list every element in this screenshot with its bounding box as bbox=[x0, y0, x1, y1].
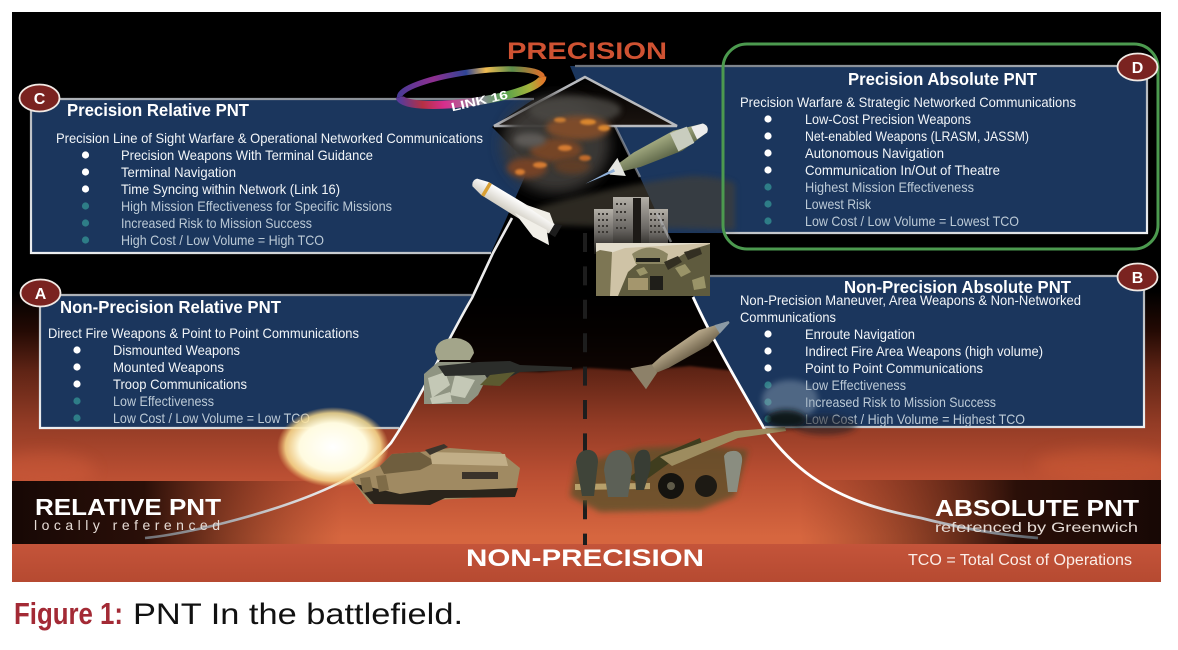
absolute PNT curve bbox=[693, 297, 1038, 538]
panel A: Non-Precision Relative PNT: Direct Fire Weapons & Point to Point Communications bbox=[48, 325, 359, 341]
landscape haze bbox=[535, 176, 735, 230]
panel D: Precision Absolute PNT: Low-Cost Precision Weapons bbox=[805, 111, 971, 127]
heading: non-precision: NON-PRECISION bbox=[466, 545, 704, 572]
panel C: Precision Relative PNT: Precision Relative PNT bbox=[67, 100, 249, 120]
badge B: B bbox=[1132, 270, 1143, 287]
panel C: Precision Relative PNT: Precision Line of Sight Warfare & Operational Networked Communications bbox=[56, 130, 483, 146]
building bbox=[594, 197, 668, 254]
panel C: Precision Relative PNT: High Cost / Low Volume = High TCO bbox=[121, 232, 324, 248]
panel B: Non-Precision Absolute PNT: Indirect Fire Area Weapons (high volume) bbox=[805, 343, 1043, 359]
panel D: Precision Absolute PNT: Precision Absolute PNT bbox=[848, 69, 1037, 89]
badge B bbox=[1118, 264, 1158, 290]
center dashed axis bbox=[583, 233, 587, 545]
icon: white cruise missile bbox=[465, 171, 564, 247]
heading: precision: PRECISION bbox=[507, 38, 667, 65]
panel B: Non-Precision Absolute PNT bbox=[693, 276, 1144, 427]
caption: figure 1: PNT In the battlefield. bbox=[133, 598, 463, 631]
icon: green guided bomb bbox=[581, 117, 712, 194]
icon: artillery smoke bbox=[762, 380, 857, 435]
explosion cloud bbox=[502, 96, 621, 193]
panel A: Non-Precision Relative PNT: Troop Communications bbox=[113, 376, 247, 392]
label: relative PNT: locally referenced bbox=[34, 517, 220, 533]
label: relative PNT: RELATIVE PNT bbox=[35, 494, 222, 520]
inner pyramid lines bbox=[615, 126, 671, 242]
panel B: Non-Precision Absolute PNT: Non-Precision Maneuver, Area Weapons & Non-Networked bbox=[740, 292, 1081, 308]
badge A: A bbox=[35, 286, 47, 303]
panel A: Non-Precision Relative PNT: Dismounted Weapons bbox=[113, 342, 240, 358]
panel D: Precision Absolute PNT bbox=[570, 66, 1147, 233]
panel D: Precision Absolute PNT: Autonomous Navigation bbox=[805, 145, 944, 161]
label: absolute PNT bbox=[935, 495, 1140, 535]
panel D: Precision Absolute PNT: Communication In/Out of Theatre bbox=[805, 162, 1000, 178]
badge C: C bbox=[34, 91, 46, 108]
photo: soldier with radio bbox=[596, 243, 710, 296]
panel B: Non-Precision Absolute PNT: Low Effectiveness bbox=[805, 377, 906, 393]
panel A: Non-Precision Relative PNT: Low Effectiveness bbox=[113, 393, 214, 409]
panel D: Precision Absolute PNT: Low Cost / Low Volume = Lowest TCO bbox=[805, 213, 1019, 229]
pyramid cap triangle bbox=[494, 77, 677, 126]
panel B: Non-Precision Absolute PNT: Enroute Navigation bbox=[805, 326, 915, 342]
icon: Link 16 ring: LINK 16 bbox=[450, 88, 510, 114]
badge D bbox=[1118, 54, 1158, 80]
panel D: Precision Absolute PNT: Highest Mission Effectiveness bbox=[805, 179, 974, 195]
icon: tank muzzle flash bbox=[277, 407, 389, 487]
icon: howitzer crew bbox=[570, 427, 786, 512]
label: absolute PNT: referenced by Greenwich bbox=[935, 519, 1138, 535]
caption: figure 1 bbox=[14, 596, 463, 631]
icon: Abrams tank bbox=[351, 444, 520, 505]
label: relative PNT bbox=[34, 494, 222, 533]
badge C bbox=[20, 84, 60, 112]
panel C: Precision Relative PNT: Precision Weapons With Terminal Guidance bbox=[121, 147, 373, 163]
highlight: green outline around panel D bbox=[723, 44, 1158, 249]
panel D: Precision Absolute PNT: Net-enabled Weapons (LRASM, JASSM) bbox=[805, 128, 1029, 144]
panel A: Non-Precision Relative PNT bbox=[40, 295, 472, 428]
panel A: Non-Precision Relative PNT: Non-Precision Relative PNT bbox=[60, 297, 281, 317]
panel B: Non-Precision Absolute PNT: Low Cost / High Volume = Highest TCO bbox=[805, 411, 1025, 427]
label: absolute PNT: ABSOLUTE PNT bbox=[935, 495, 1140, 521]
panel B: Non-Precision Absolute PNT: Point to Point Communications bbox=[805, 360, 983, 376]
panel C: Precision Relative PNT bbox=[31, 99, 534, 253]
panel A: Non-Precision Relative PNT: Low Cost / Low Volume = Low TCO bbox=[113, 410, 310, 426]
panel B: Non-Precision Absolute PNT: Non-Precision Absolute PNT bbox=[844, 277, 1071, 297]
panel C: Precision Relative PNT: Terminal Navigation bbox=[121, 164, 236, 180]
panel B: Non-Precision Absolute PNT: Increased Risk to Mission Success bbox=[805, 394, 996, 410]
panel C: Precision Relative PNT: Time Syncing within Network (Link 16) bbox=[121, 181, 340, 197]
icon: gravity bomb bbox=[631, 311, 736, 390]
note: TCO definition: TCO = Total Cost of Operations bbox=[908, 552, 1132, 569]
icon: rifleman bbox=[424, 338, 572, 404]
panel B: Non-Precision Absolute PNT: Communications bbox=[740, 309, 836, 325]
panel C: Precision Relative PNT: High Mission Effectiveness for Specific Missions bbox=[121, 198, 392, 214]
caption: figure 1: Figure 1: bbox=[14, 596, 123, 631]
panel C: Precision Relative PNT: Increased Risk to Mission Success bbox=[121, 215, 312, 231]
badge D: D bbox=[1132, 60, 1143, 77]
panel A: Non-Precision Relative PNT: Mounted Weapons bbox=[113, 359, 224, 375]
pyramid interior bbox=[472, 77, 693, 298]
relative PNT curve bbox=[145, 218, 512, 538]
panel D: Precision Absolute PNT: Lowest Risk bbox=[805, 196, 872, 212]
icon: Link 16 ring bbox=[398, 62, 544, 114]
badge A bbox=[20, 280, 60, 306]
panel D: Precision Absolute PNT: Precision Warfare & Strategic Networked Communications bbox=[740, 94, 1076, 110]
